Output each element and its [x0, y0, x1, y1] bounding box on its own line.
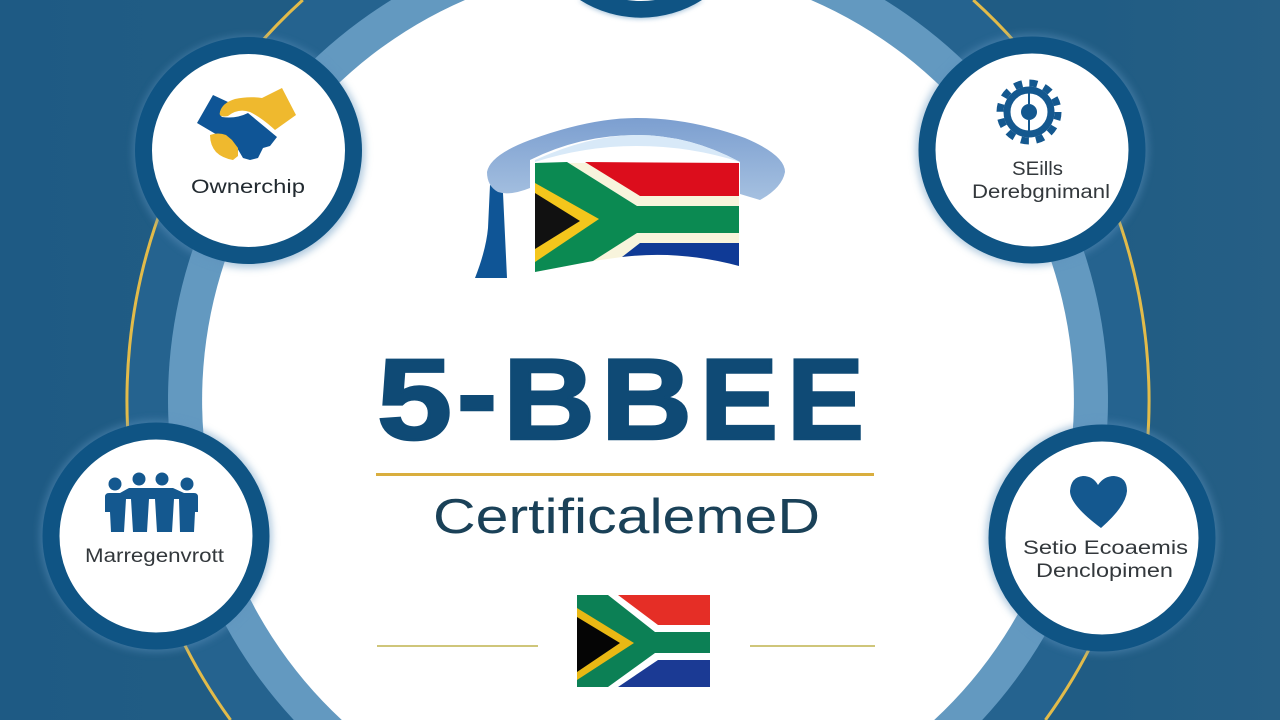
outer band [127, 0, 1149, 720]
gold divider [376, 473, 874, 476]
title: B [601, 336, 692, 464]
title [377, 330, 864, 464]
title: - [457, 330, 497, 458]
label: Marregenvrott [85, 546, 225, 567]
icon: heart [1070, 476, 1127, 528]
flag red stripe [618, 595, 710, 625]
flag yellow chevron [535, 183, 599, 262]
footer flag with rules [377, 595, 875, 687]
flag white field [577, 595, 710, 687]
label: Derebgnimanl [972, 182, 1110, 203]
cap brim [487, 118, 785, 200]
white central disc [202, 0, 1074, 720]
icon: gear [1000, 83, 1058, 141]
label: SEills [1012, 159, 1063, 180]
label: Ownerchip [191, 177, 305, 198]
emblem: flag with cap [475, 118, 785, 278]
node: Socio Economic Development [986, 422, 1218, 654]
node: top (cropped) [578, 0, 704, 19]
title: B [503, 336, 595, 464]
node: Ownership [133, 36, 365, 268]
subtitle: CertificalemeD [433, 490, 820, 544]
left rule [377, 645, 538, 647]
icon: people [105, 472, 198, 532]
cap highlight [535, 135, 740, 162]
flag black triangle [535, 193, 580, 249]
flag green pall [535, 162, 739, 272]
label: Setio Ecoaemis [1023, 538, 1188, 559]
node ring [144, 46, 354, 256]
flag blue stripe [622, 243, 739, 266]
node glow [916, 34, 1148, 266]
light blue ring [168, 0, 1108, 720]
flag white field [535, 163, 739, 272]
node ring [997, 433, 1207, 643]
flag black triangle [577, 617, 620, 672]
flag red stripe [585, 162, 739, 196]
right rule [750, 645, 875, 647]
flag blue stripe [618, 660, 710, 687]
node glow [986, 422, 1218, 654]
node ring [927, 45, 1137, 255]
icon: handshake [197, 88, 296, 160]
node: Management [40, 420, 272, 652]
node ring [51, 431, 261, 641]
node glow [133, 36, 365, 268]
title: 5 [377, 336, 452, 464]
cap drape [475, 185, 507, 278]
label: Denclopimen [1036, 561, 1173, 582]
node glow [40, 420, 272, 652]
flag yellow chevron [577, 608, 634, 680]
title: E [787, 336, 864, 464]
title: E [700, 336, 778, 464]
flag green pall [577, 595, 710, 687]
gold ring [127, 0, 1149, 720]
node: Skills Development [916, 34, 1148, 266]
